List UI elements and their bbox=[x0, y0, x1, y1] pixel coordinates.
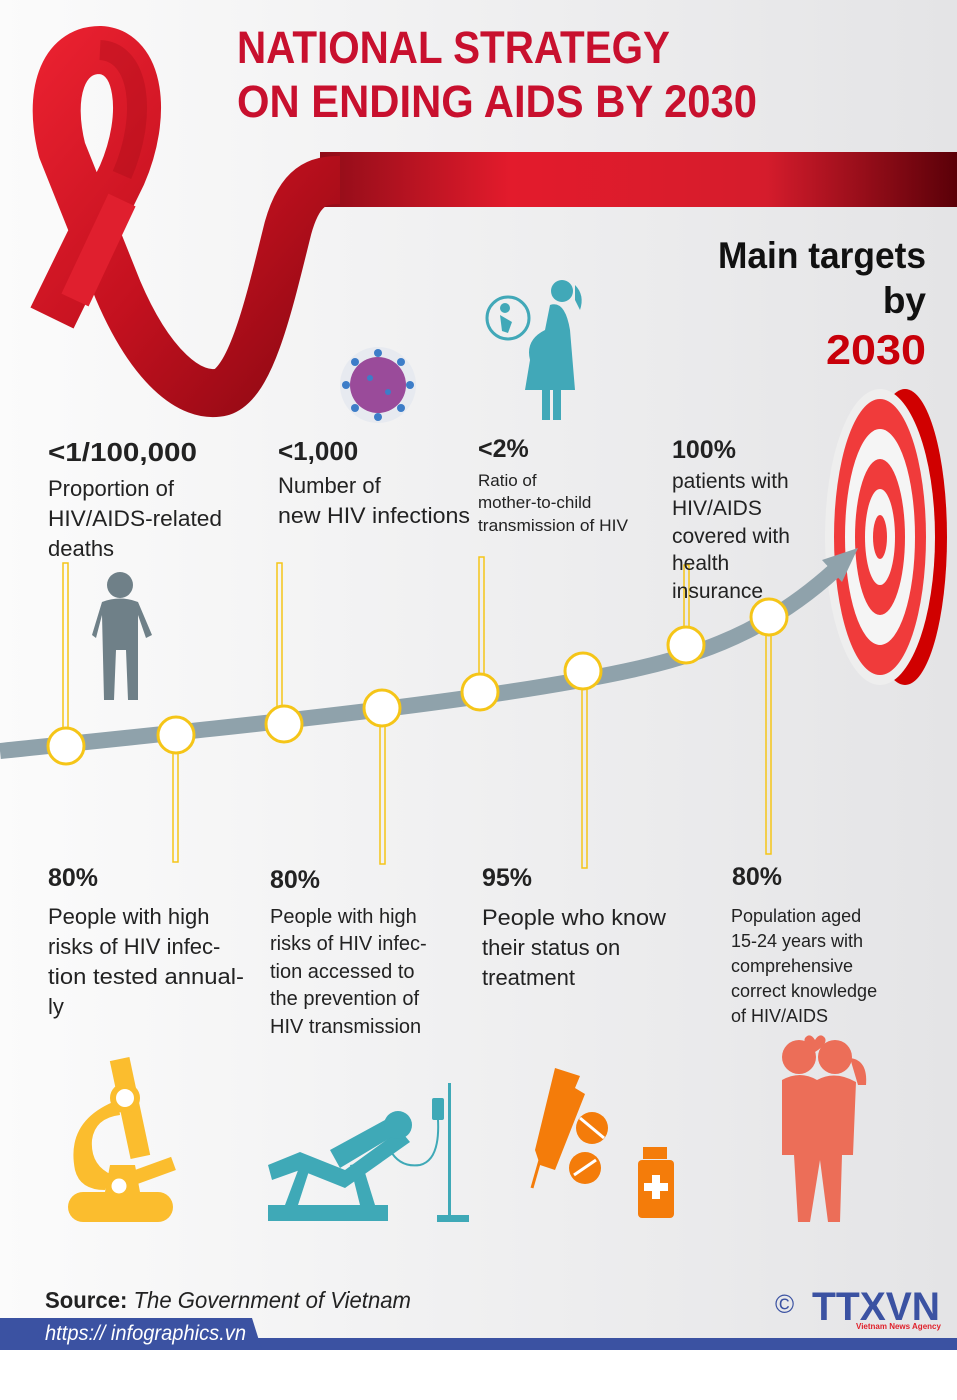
target 3 text: transmission of HIV bbox=[478, 516, 629, 535]
target 1 text: Proportion of bbox=[48, 476, 175, 501]
heading: main targets bbox=[718, 235, 926, 373]
target 8 text: correct knowledge bbox=[731, 981, 877, 1001]
target 4 text: patients with bbox=[672, 470, 789, 493]
target 3 text bbox=[478, 435, 629, 535]
logo: TTXVN: Vietnam News Agency bbox=[856, 1322, 941, 1331]
vertical connector lines bbox=[63, 557, 771, 868]
icon: syringe and pills bbox=[532, 1068, 674, 1218]
heading: main targets: by bbox=[883, 280, 926, 321]
target 7 text: People who know bbox=[482, 905, 666, 930]
target 3 text: Ratio of bbox=[478, 471, 537, 490]
target 3 text: <2% bbox=[478, 435, 529, 463]
logo: TTXVN: TTXVN bbox=[812, 1285, 940, 1329]
target 6 text: tion accessed to bbox=[270, 961, 415, 983]
target 8 text: comprehensive bbox=[731, 956, 853, 976]
icon: patient with IV bbox=[268, 1083, 469, 1222]
title: ON ENDING AIDS BY 2030 bbox=[237, 76, 757, 127]
timeline nodes bbox=[48, 599, 787, 764]
target 6 text: 80% bbox=[270, 866, 320, 894]
progress arrow bbox=[0, 548, 858, 751]
target 8 text bbox=[731, 863, 877, 1026]
logo: TTXVN: © bbox=[775, 1289, 794, 1319]
target 6 text: risks of HIV infec- bbox=[270, 933, 427, 955]
icon: microscope bbox=[68, 1057, 176, 1222]
target 4 text: HIV/AIDS bbox=[672, 497, 762, 520]
target 4 text: insurance bbox=[672, 580, 763, 603]
icon: couple hugging bbox=[782, 1035, 866, 1222]
target 5 text: tion tested annual- bbox=[48, 964, 244, 989]
footer bar bbox=[0, 1318, 957, 1350]
target 3 text: mother-to-child bbox=[478, 493, 591, 512]
target 8 text: 80% bbox=[732, 863, 782, 891]
target 4 text: covered with bbox=[672, 525, 790, 548]
title bbox=[237, 22, 757, 127]
target 8 text: Population aged bbox=[731, 906, 861, 926]
target 6 text bbox=[270, 866, 427, 1038]
target 5 text: ly bbox=[48, 994, 64, 1019]
icon: virus bbox=[340, 347, 416, 423]
target 5 text: risks of HIV infec- bbox=[48, 934, 220, 959]
target 8 text: 15-24 years with bbox=[731, 931, 863, 951]
target 4 text bbox=[672, 436, 790, 603]
target 4 text: health bbox=[672, 552, 729, 575]
footer bar: https:// infographics.vn bbox=[45, 1322, 246, 1345]
target 1 text: HIV/AIDS-related bbox=[48, 506, 222, 531]
title: NATIONAL STRATEGY bbox=[237, 22, 670, 73]
target 7 text bbox=[482, 864, 666, 990]
target 2 text bbox=[278, 436, 470, 528]
target 1 text bbox=[48, 437, 222, 561]
target 5 text bbox=[48, 864, 244, 1019]
target 1 text: deaths bbox=[48, 536, 114, 561]
target 5 text: 80% bbox=[48, 864, 98, 892]
target 6 text: the prevention of bbox=[270, 988, 419, 1010]
target 1 text: <1/100,000 bbox=[48, 437, 197, 467]
target 7 text: their status on bbox=[482, 935, 620, 960]
source: Source: The Government of Vietnam bbox=[45, 1287, 411, 1313]
icon: person bbox=[92, 572, 152, 700]
target 2 text: <1,000 bbox=[278, 436, 358, 466]
ribbon bbox=[52, 50, 957, 393]
target 2 text: Number of bbox=[278, 473, 382, 498]
target 6 text: HIV transmission bbox=[270, 1016, 421, 1038]
icon: target bbox=[825, 389, 947, 685]
icon: pregnant woman bbox=[487, 280, 582, 420]
target 7 text: treatment bbox=[482, 965, 575, 990]
heading: main targets: Main targets bbox=[718, 235, 926, 276]
target 2 text: new HIV infections bbox=[278, 503, 470, 528]
heading: main targets: 2030 bbox=[826, 326, 926, 373]
target 6 text: People with high bbox=[270, 906, 417, 928]
target 5 text: People with high bbox=[48, 904, 209, 929]
target 7 text: 95% bbox=[482, 864, 532, 892]
target 8 text: of HIV/AIDS bbox=[731, 1006, 828, 1026]
target 4 text: 100% bbox=[672, 436, 736, 464]
